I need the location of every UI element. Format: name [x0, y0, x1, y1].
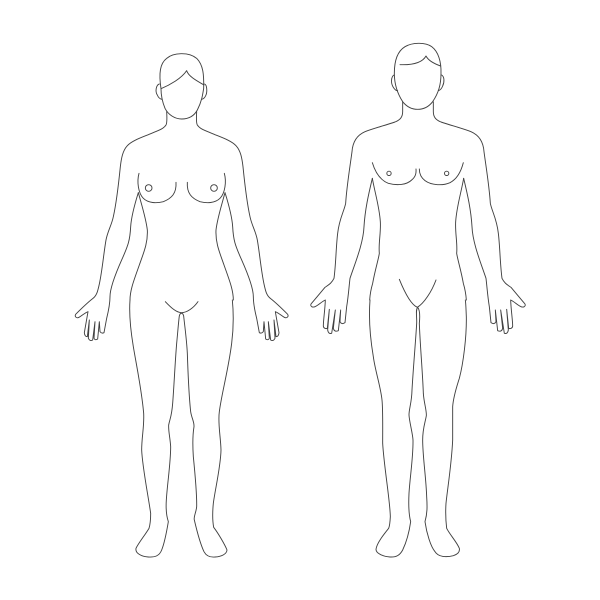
female hair line	[161, 71, 204, 89]
female head	[160, 54, 204, 119]
male right chest line	[419, 163, 463, 185]
male upper body	[311, 43, 525, 334]
figure: female outline	[75, 54, 288, 557]
male pelvis line	[399, 279, 436, 307]
female right chest dot	[211, 185, 217, 191]
female legs	[130, 300, 233, 557]
male left shoulder, arm and hand	[311, 102, 403, 334]
male hair line	[400, 56, 441, 66]
male right ear	[438, 75, 444, 91]
male right chest dot	[444, 171, 449, 175]
female right shoulder, arm and hand	[196, 112, 288, 341]
female left shoulder, arm and hand	[75, 112, 167, 341]
male left ear	[392, 75, 398, 91]
male legs	[370, 300, 466, 557]
female pelvis line	[165, 302, 198, 313]
female right chest line	[187, 173, 225, 203]
female right torso side	[216, 193, 233, 300]
male right shoulder, arm and hand	[433, 102, 525, 334]
female right ear	[202, 84, 207, 99]
female left torso side	[130, 193, 147, 300]
female left chest dot	[145, 185, 152, 191]
male head	[394, 43, 441, 109]
female left chest line	[138, 173, 176, 203]
male left chest line	[372, 163, 416, 185]
female upper body	[75, 54, 288, 341]
male right torso side	[456, 178, 466, 300]
female left ear	[156, 84, 162, 99]
figure: male outline	[311, 43, 525, 557]
male left torso side	[370, 178, 380, 300]
male left chest dot	[387, 171, 391, 175]
